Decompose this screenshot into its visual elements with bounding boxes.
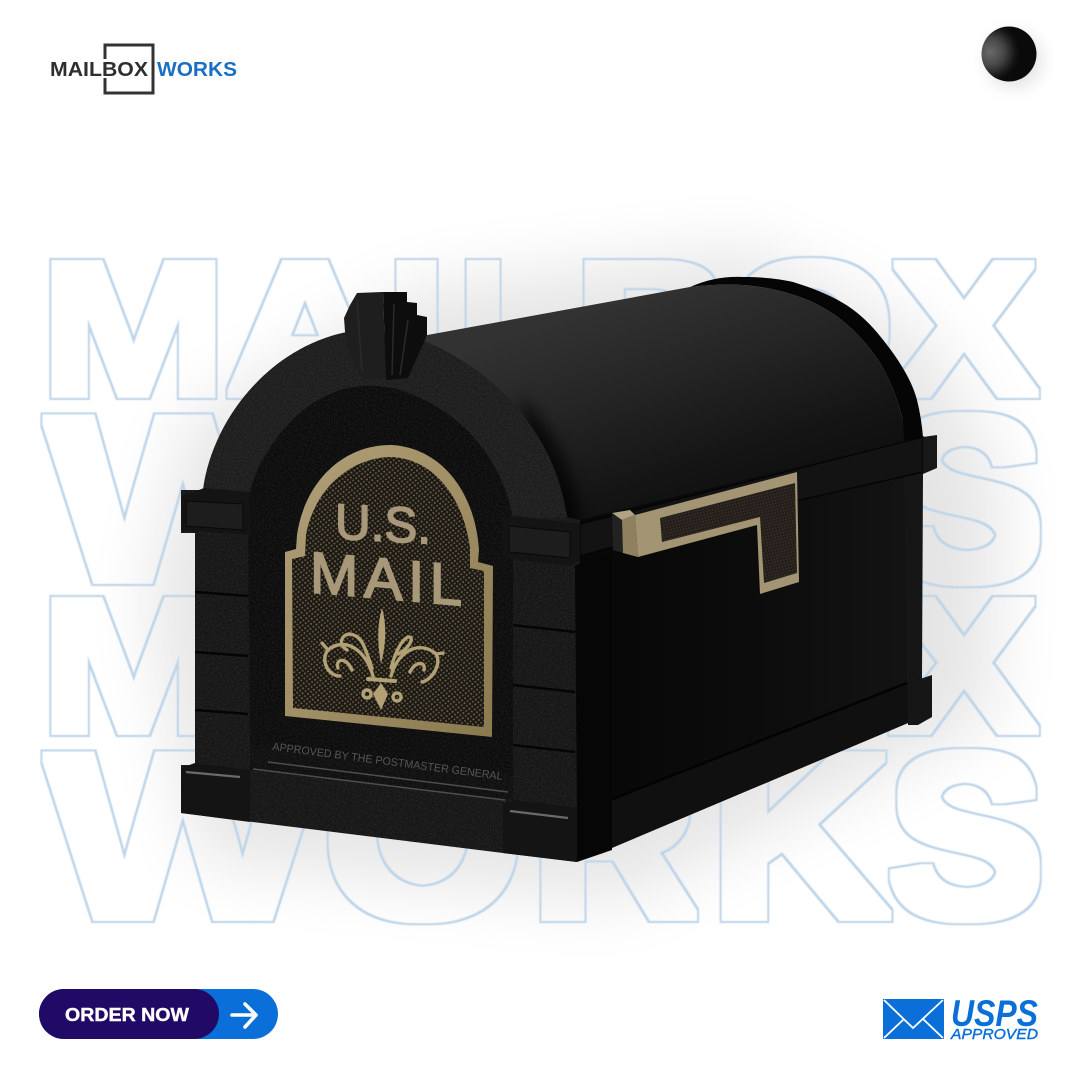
- order now button: [39, 989, 278, 1039]
- background outline wordmark: [40, 224, 1044, 966]
- foot highlight: [510, 811, 568, 818]
- side panel right strip: [904, 473, 923, 684]
- outline word: MAILBOX row 2: I: [386, 561, 448, 772]
- button label: ORDER NOW: [65, 1004, 190, 1025]
- outline word: MAILBOX row 1: O: [727, 224, 894, 435]
- outline word: WORKS row 2: O: [323, 707, 523, 966]
- fleur-de-lis: [322, 608, 443, 710]
- logo square: [105, 45, 153, 93]
- outline word: WORKS row 1: K: [710, 370, 889, 629]
- glossy black colour swatch: [982, 26, 1041, 87]
- outline word: MAILBOX row 1: A: [226, 224, 384, 435]
- soft shadow behind mailbox: [150, 250, 1000, 900]
- lower foot cap: [908, 675, 932, 725]
- crown stepped side: [383, 292, 427, 380]
- right top block: [503, 516, 580, 566]
- upper band: [580, 437, 923, 556]
- outline word: MAILBOX row 1: X: [891, 224, 1037, 435]
- block body: [503, 516, 580, 566]
- outline word: WORKS row 1: W: [47, 370, 319, 629]
- outline word: MAILBOX row 2: X: [891, 561, 1037, 772]
- outline word: WORKS row 1: R: [531, 370, 697, 629]
- base top lines: [253, 762, 508, 800]
- block face: [509, 526, 570, 558]
- USPS approved badge: [883, 993, 1038, 1043]
- fleur center petal: [378, 608, 385, 664]
- mailbox body: domed top: [400, 285, 923, 560]
- mailbox body: rim: [690, 277, 923, 442]
- outline word: WORKS row 2: R: [531, 707, 697, 966]
- mailbox body: side panel: [560, 440, 922, 862]
- outline word: MAILBOX row 2: M: [40, 561, 226, 772]
- logo word WORKS: WORKS: [157, 59, 237, 81]
- USPS wordmark: USPS: [951, 993, 1038, 1034]
- outline word: WORKS row 1: O: [323, 370, 523, 629]
- outline word: MAILBOX row 1: M: [40, 224, 226, 435]
- outline word: MAILBOX row 2: O: [727, 561, 894, 772]
- front face base: [175, 325, 585, 870]
- crown base: [344, 292, 386, 380]
- fleur lower petal: [373, 683, 388, 710]
- front face: [175, 325, 585, 870]
- swatch ball: [982, 26, 1036, 82]
- logo word MAILBOX: MAILBOX: [50, 59, 149, 81]
- gold flag: [612, 472, 799, 594]
- foot body: [503, 800, 577, 862]
- fleur cross bar: [368, 679, 395, 681]
- button blue pill: [39, 989, 278, 1039]
- icon: envelope: [883, 999, 944, 1039]
- flag frame: [635, 472, 799, 594]
- left pillar grooves: [195, 592, 248, 714]
- recess lower wall: [250, 745, 513, 800]
- envelope flap lines: [884, 1000, 943, 1038]
- fleur left scroll: [322, 634, 373, 676]
- logo: Mailbox Works: [50, 45, 237, 93]
- plaque gold frame: [285, 445, 493, 737]
- right corner shadow: [577, 555, 612, 862]
- upper band end cap: [923, 435, 937, 474]
- arch upper tone: [203, 332, 344, 488]
- block body: [181, 488, 250, 535]
- outline word: MAILBOX row 2: B: [574, 561, 731, 772]
- left top block: [181, 488, 250, 535]
- right foot: [503, 800, 577, 862]
- inner arch recess: [248, 386, 513, 775]
- flag hinge top: [612, 510, 635, 520]
- outline word: WORKS row 2: K: [710, 707, 889, 966]
- fleur side rings: [363, 690, 401, 701]
- right pillar grooves: [513, 625, 575, 752]
- envelope body: [883, 999, 944, 1039]
- outline word: MAILBOX row 2: A: [226, 561, 384, 772]
- swatch shadow: [987, 33, 1041, 87]
- fleur right scroll: [391, 637, 443, 682]
- outline word: MAILBOX row 1: I: [386, 224, 448, 435]
- flag hinge front: [622, 515, 638, 557]
- flag inlay: [660, 483, 797, 583]
- block face: [186, 501, 243, 530]
- art deco crown: [344, 292, 427, 380]
- mailbox illustration: [175, 277, 937, 870]
- plaque pebbled field: [292, 457, 484, 727]
- outline word: MAILBOX row 1: L: [459, 224, 565, 435]
- left foot: [181, 763, 250, 822]
- front plaque: [285, 445, 493, 737]
- plaque text MAIL: MAIL: [310, 540, 462, 618]
- outline word: MAILBOX row 1: B: [574, 224, 731, 435]
- flag hinge dark square: [612, 514, 623, 553]
- lower rail: [607, 683, 908, 850]
- outline word: MAILBOX row 2: L: [459, 561, 565, 772]
- outline word: WORKS row 2: S: [888, 707, 1044, 966]
- outline word: WORKS row 1: S: [888, 370, 1044, 629]
- icon: arrow: [232, 1004, 256, 1027]
- plaque text U.S.: U.S.: [335, 494, 431, 555]
- texture grain: [175, 325, 585, 870]
- APPROVED wordmark: APPROVED: [950, 1026, 1038, 1043]
- foot highlight: [186, 772, 240, 777]
- crown fold lines: [357, 300, 408, 375]
- outline word: WORKS row 2: W: [47, 707, 319, 966]
- dome shade beside arch: [520, 395, 582, 530]
- lower rail highlight: [610, 683, 907, 800]
- embossed approval line: APPROVED BY THE POSTMASTER GENERAL: [272, 741, 503, 783]
- foot body: [181, 763, 250, 822]
- button navy pill: [39, 989, 219, 1039]
